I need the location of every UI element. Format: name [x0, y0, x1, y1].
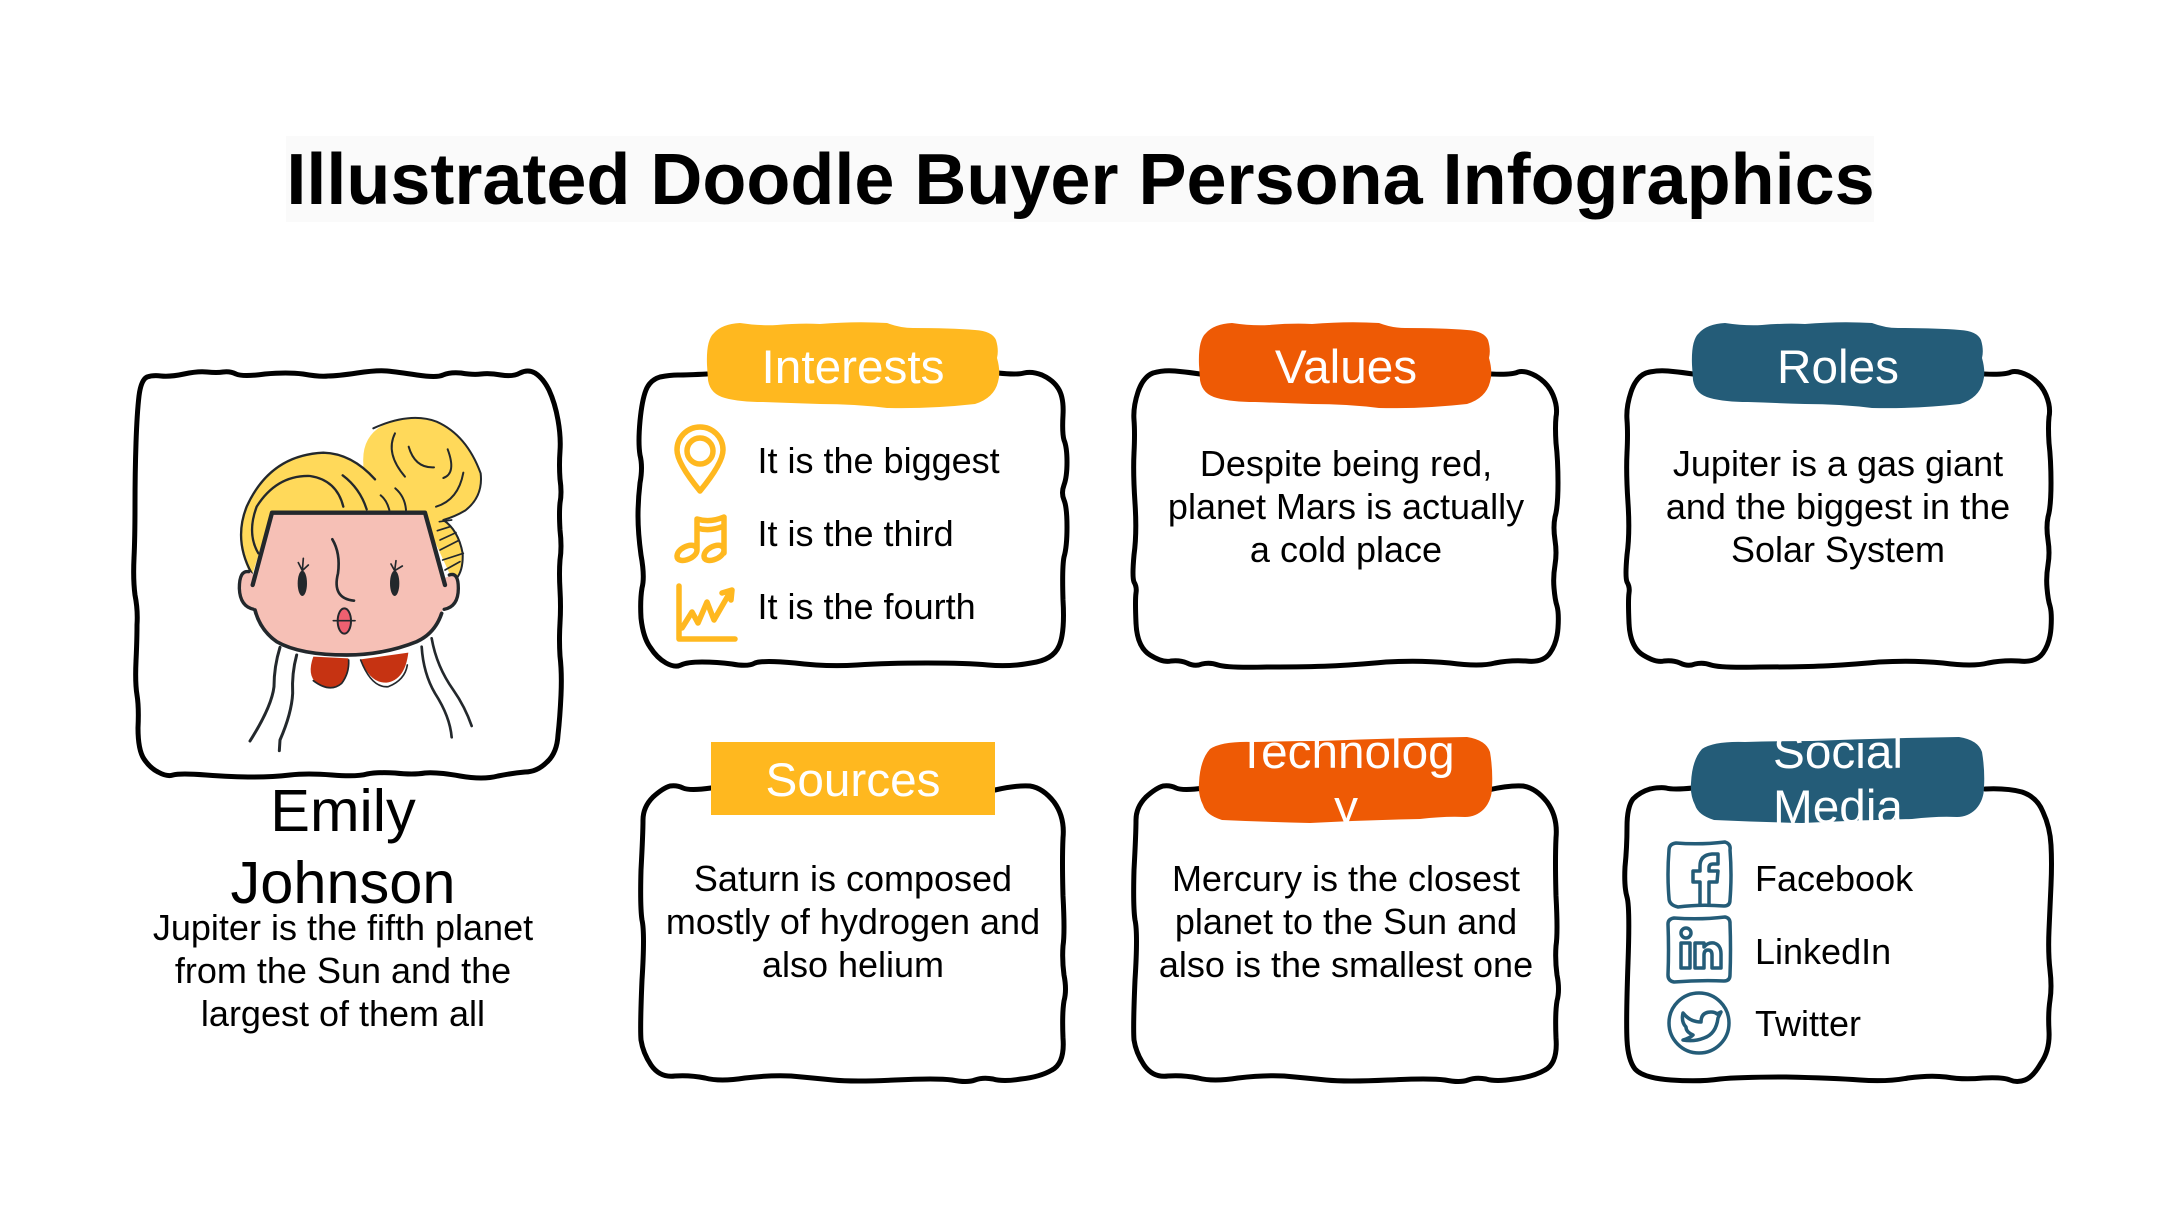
list text: It is the biggest — [758, 440, 1000, 481]
heading text: y — [1334, 781, 1358, 834]
list text: LinkedIn — [1755, 931, 1891, 972]
list text: Twitter — [1755, 1003, 1861, 1044]
face — [252, 513, 445, 655]
heading text: Social — [1773, 726, 1903, 779]
body text: Mercury is the closest — [1172, 858, 1520, 899]
persona name: Johnson — [231, 849, 455, 916]
collar — [311, 657, 349, 688]
lips — [338, 608, 351, 634]
list text: Facebook — [1755, 858, 1914, 899]
body text: Solar System — [1731, 529, 1945, 570]
heading pill — [1692, 322, 1984, 408]
panel: roles — [1626, 322, 2051, 667]
heading text: Interests — [762, 341, 944, 394]
list text: It is the third — [758, 513, 954, 554]
ears — [239, 572, 260, 609]
heading pill — [1199, 322, 1491, 408]
illustration: woman with blonde bun — [239, 418, 481, 751]
body text: mostly of hydrogen and — [666, 901, 1040, 942]
panel: values — [1133, 322, 1558, 667]
heading pill — [707, 322, 999, 408]
portrait frame — [134, 371, 561, 778]
body text: Saturn is composed — [694, 858, 1012, 899]
title: Illustrated Doodle Buyer Persona Infographics — [286, 140, 1875, 220]
body text: planet to the Sun and — [1175, 901, 1517, 942]
eyes — [298, 571, 307, 596]
heading text: Technolog — [1237, 726, 1455, 779]
body text: a cold place — [1250, 529, 1442, 570]
panel: interests — [638, 322, 1067, 666]
panel: technology — [1134, 726, 1558, 1082]
neck and shoulder lines — [250, 647, 280, 741]
panel: social media — [1625, 726, 2052, 1082]
icon: growth chart — [679, 586, 735, 639]
icon: facebook — [1668, 842, 1731, 907]
nose — [332, 539, 354, 601]
icon: location pin — [677, 427, 723, 491]
icon: twitter — [1669, 993, 1729, 1053]
panel: sources — [641, 742, 1066, 1082]
heading pill — [1199, 737, 1492, 823]
heading pill — [1691, 737, 1984, 823]
persona description: largest of them all — [201, 993, 485, 1034]
heading text: Values — [1275, 341, 1417, 394]
body text: Despite being red, — [1200, 443, 1492, 484]
body text: planet Mars is actually — [1168, 486, 1524, 527]
icon: music notes — [677, 517, 724, 560]
heading box — [711, 742, 995, 815]
frame — [641, 786, 1066, 1082]
body text: also is the smallest one — [1159, 944, 1533, 985]
body text: Jupiter is a gas giant — [1673, 443, 2003, 484]
frame — [1625, 788, 2052, 1082]
frame — [1134, 786, 1558, 1082]
icon: linkedin — [1668, 917, 1730, 982]
list text: It is the fourth — [758, 586, 976, 627]
heading text: Media — [1773, 781, 1903, 834]
heading text: Sources — [766, 754, 940, 807]
frame — [1133, 371, 1558, 667]
frame — [1626, 371, 2051, 667]
persona name: Emily — [270, 777, 416, 844]
persona description: Jupiter is the fifth planet — [153, 907, 533, 948]
body text: also helium — [762, 944, 944, 985]
persona description: from the Sun and the — [175, 950, 511, 991]
body text: and the biggest in the — [1666, 486, 2010, 527]
frame — [638, 372, 1067, 666]
panel: persona — [134, 371, 561, 1034]
heading text: Roles — [1777, 341, 1899, 394]
